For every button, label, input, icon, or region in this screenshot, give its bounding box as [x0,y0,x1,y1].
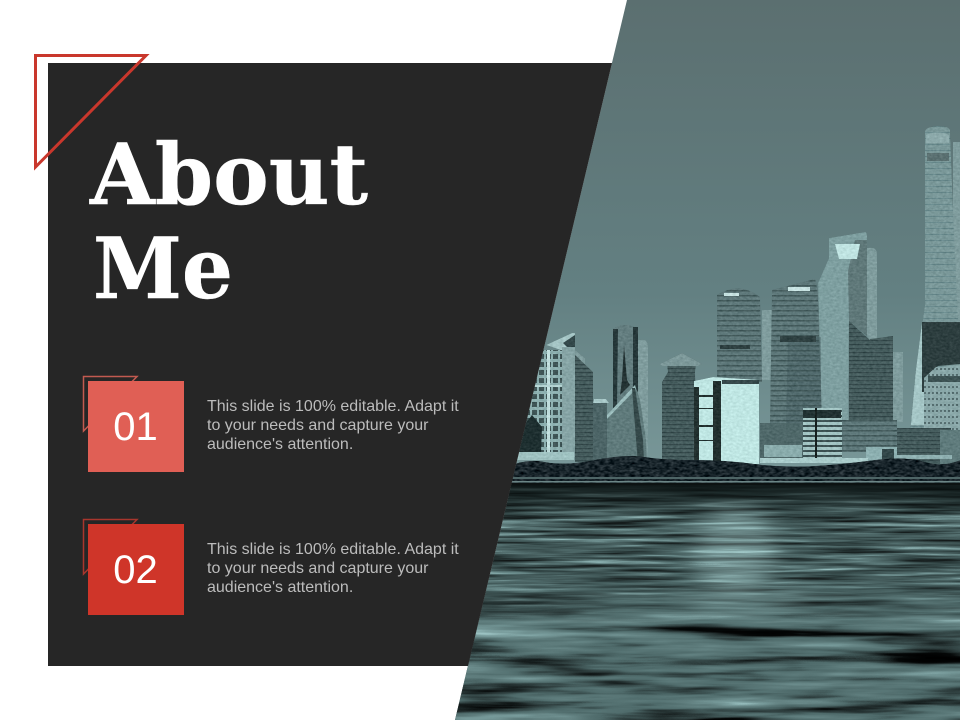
item 01 description: This slide is 100% editable. Adapt it [207,398,459,415]
item 02 [84,520,459,615]
item 02 description: audience's attention. [207,579,353,596]
title [89,125,368,318]
item 01 triangle outline [84,376,137,431]
sky [512,0,960,483]
title: About [89,125,368,224]
title: Me [93,219,233,318]
decorative red triangle outline [36,56,146,167]
item 02 triangle outline [84,520,137,574]
item 02 description [207,541,459,596]
item 01 description: to your needs and capture your [207,417,429,434]
item 02 description: This slide is 100% editable. Adapt it [207,541,459,558]
dark panel [48,63,612,666]
item 01 [84,376,459,472]
item 02 number box [88,524,184,615]
item 01 description: audience's attention. [207,436,353,453]
item 02 number: 02 [113,548,158,592]
item 01 number: 01 [113,405,158,449]
item 01 description [207,398,459,453]
item 01 number box [88,381,184,472]
tree line and embankment [511,456,960,485]
skyline buildings [516,126,960,467]
water [440,485,960,720]
photo: city skyline over water [440,0,960,720]
item 02 description: to your needs and capture your [207,560,429,577]
